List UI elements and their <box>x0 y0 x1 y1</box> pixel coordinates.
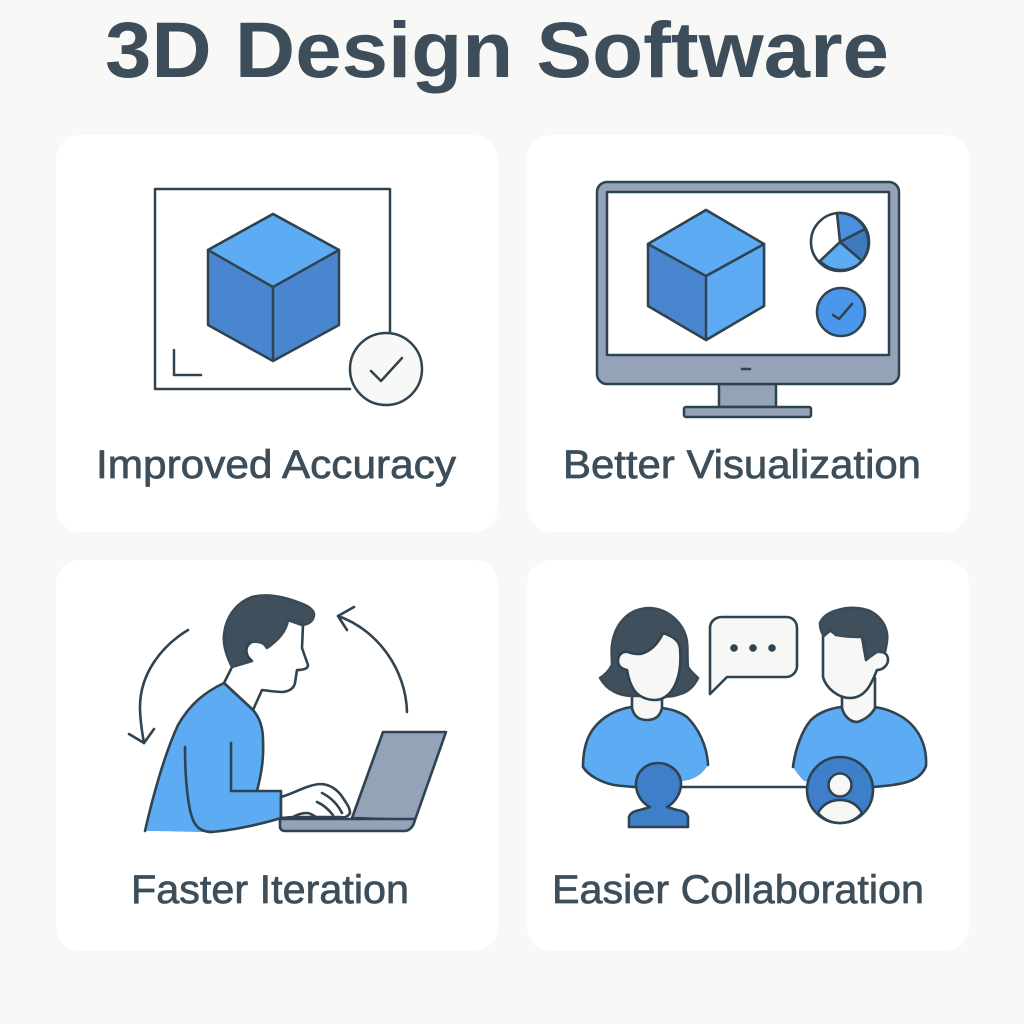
panel: improved accuracy card <box>56 135 498 532</box>
left hair <box>600 608 698 697</box>
title: 3D Design Software <box>105 5 889 94</box>
right hair <box>820 608 887 659</box>
small person <box>629 763 688 827</box>
panel: easier collaboration card <box>527 560 969 951</box>
panel: better visualization card <box>527 135 969 532</box>
icon: two people collaborating <box>583 608 926 827</box>
shirt <box>145 683 281 832</box>
left shirt <box>583 707 708 787</box>
right face <box>823 630 888 698</box>
hair <box>224 595 314 667</box>
hand <box>281 784 350 818</box>
right shirt <box>793 707 926 787</box>
left face <box>618 633 680 700</box>
icon: person at laptop with cycle arrows <box>129 595 446 832</box>
heading: faster iteration: Faster Iteration <box>131 868 409 912</box>
heading: improved accuracy: Improved Accuracy <box>96 443 456 487</box>
panel: faster iteration card <box>56 560 498 951</box>
laptop <box>352 732 446 820</box>
icon: monitor with cube and charts <box>597 182 899 417</box>
left neck <box>632 693 662 720</box>
icon: framed cube with check <box>155 189 422 405</box>
avatar circle <box>807 757 873 823</box>
neck and face <box>224 620 308 710</box>
heading: better visualization: Better Visualization <box>563 443 921 487</box>
right neck <box>842 678 875 722</box>
speech bubble <box>710 617 797 694</box>
heading: easier collaboration: Easier Collaboration <box>552 868 924 912</box>
